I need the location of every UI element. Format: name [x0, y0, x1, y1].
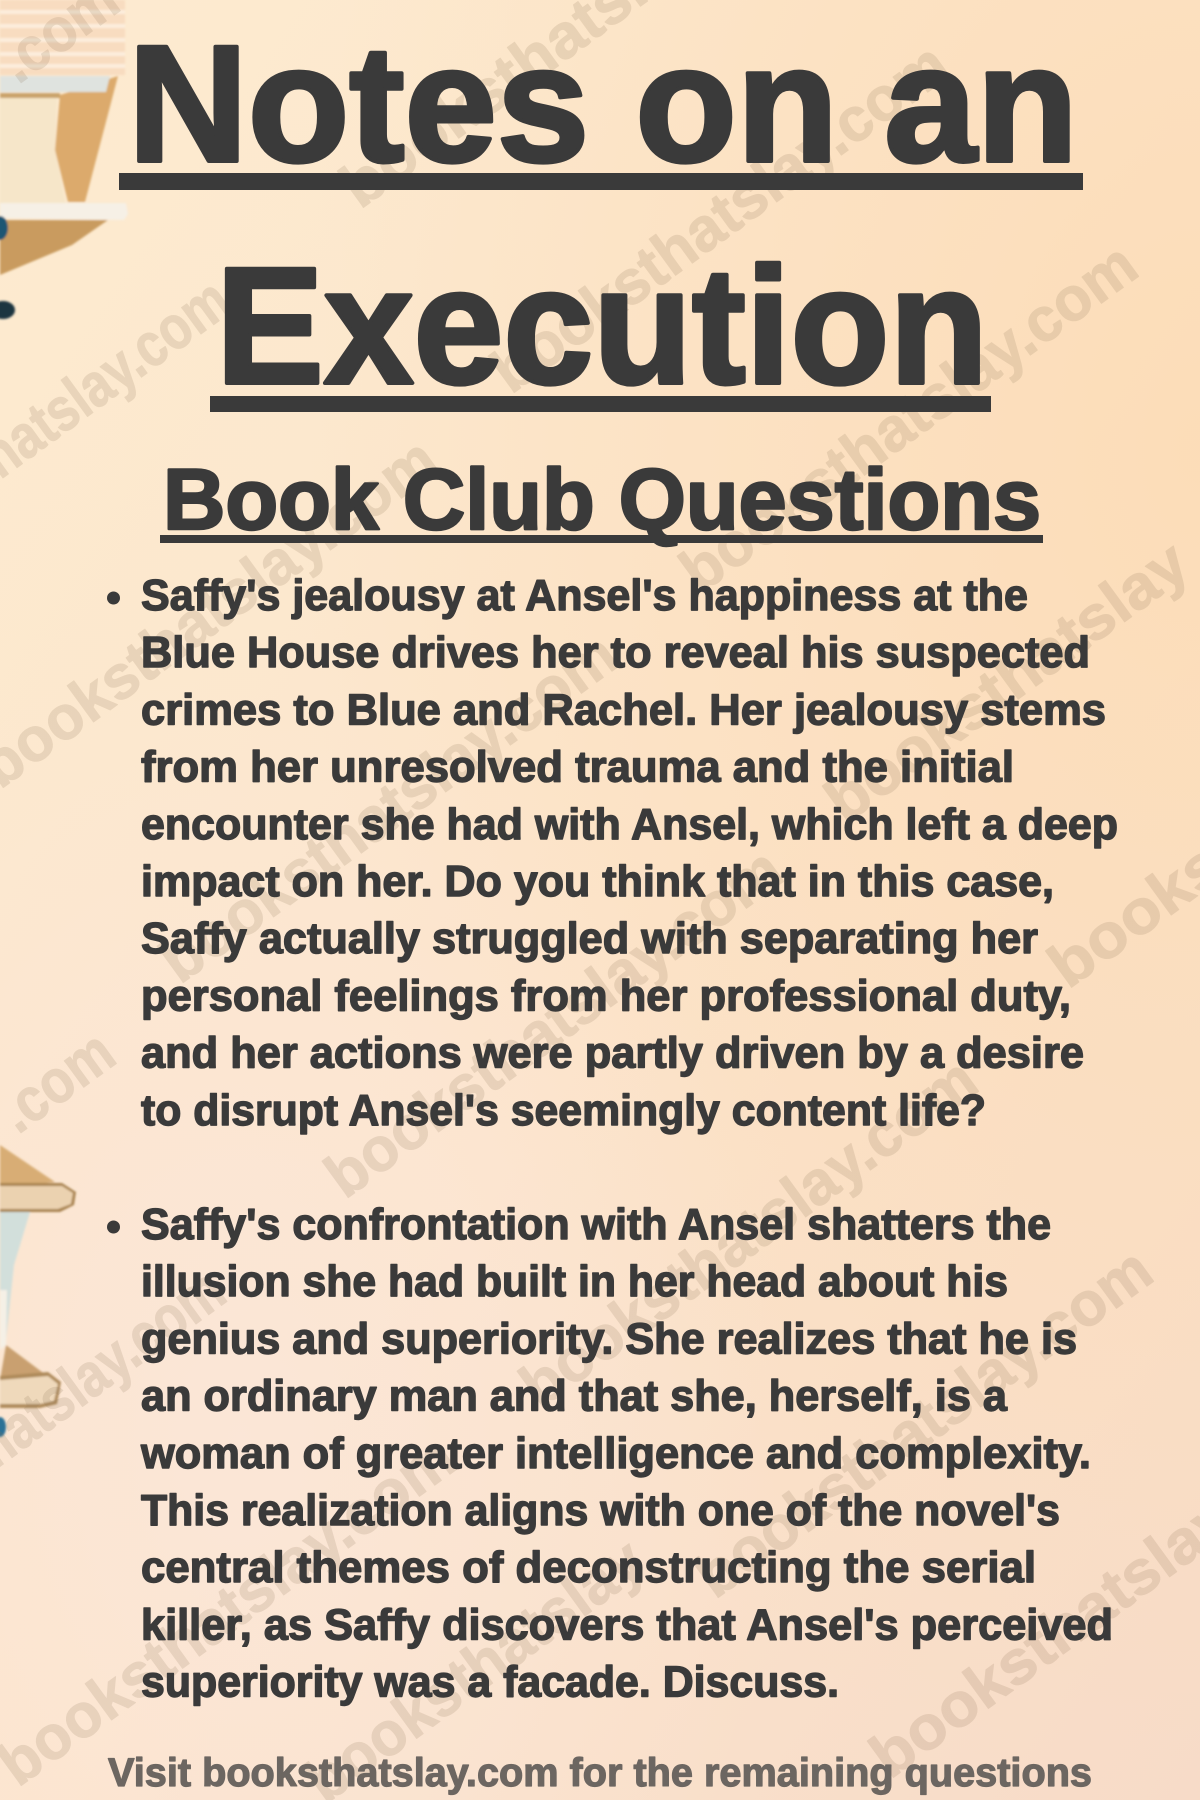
question 2: woman of greater intelligence and complexity. [140, 1429, 1091, 1478]
watermarks: booksthatslay.com [668, 230, 1150, 606]
question 1: Saffy's jealousy at Ansel's happiness at the [141, 571, 1028, 620]
title: Execution [216, 234, 988, 419]
question 1: Saffy actually struggled with separating her [141, 914, 1038, 963]
question 1 [107, 571, 1118, 1135]
question 2: This realization aligns with one of the novel's [141, 1486, 1060, 1535]
question 1: personal feelings from her professional duty, [141, 972, 1071, 1020]
question 1: encounter she had with Ansel, which left a deep [141, 800, 1118, 849]
footer call to action: Visit booksthatslay.com for the remaining questions [108, 1751, 1092, 1795]
question 1: Blue House drives her to reveal his suspected [141, 628, 1090, 677]
question 1: crimes to Blue and Rachel. Her jealousy stems [141, 686, 1106, 734]
watermarks: booksthatslay.com [479, 30, 961, 406]
question 1: from her unresolved trauma and the initial [141, 742, 1014, 792]
question 2: genius and superiority. She realizes that he is [141, 1314, 1077, 1364]
watermarks: booksthatslay.com [508, 1045, 990, 1421]
watermarks: booksthatslay.com [683, 1235, 1165, 1611]
watermarks: booksthatslay.com [313, 835, 795, 1211]
title: Notes on an [128, 12, 1078, 197]
question 2: an ordinary man and that she, herself, is a [141, 1372, 1008, 1420]
question 2: illusion she had built in her head about his [141, 1257, 1008, 1306]
question 1: and her actions were partly driven by a desire [141, 1028, 1084, 1078]
question 2: Saffy's confrontation with Ansel shatters the [141, 1200, 1051, 1249]
question 2 [107, 1200, 1113, 1706]
question 2: central themes of deconstructing the serial [141, 1543, 1036, 1592]
watermarks: booksthatslay.com [148, 620, 630, 996]
question 1: impact on her. Do you think that in this case, [141, 857, 1054, 906]
subtitle: Book Club Questions [163, 452, 1041, 548]
book stack illustration: top left [0, 0, 128, 319]
watermarks: booksthatslay.com [0, 1423, 468, 1799]
question 1: to disrupt Ansel's seemingly content life? [141, 1086, 986, 1135]
question 2: killer, as Saffy discovers that Ansel's perceived [141, 1600, 1113, 1650]
book stack illustration: lower left [0, 1145, 76, 1437]
question 2: superiority was a facade. Discuss. [141, 1658, 839, 1706]
title [119, 12, 1083, 419]
watermarks: booksthatslay [813, 527, 1200, 836]
